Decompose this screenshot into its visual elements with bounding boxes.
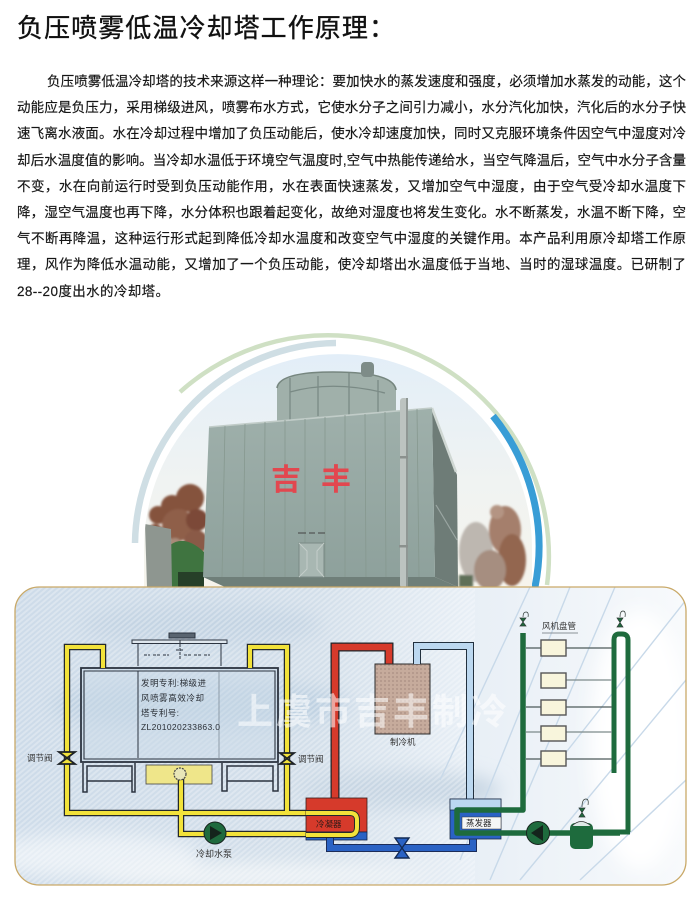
text block: principle description: 28--20度出水的冷却塔。 [17, 284, 169, 299]
text block: principle description [17, 73, 686, 299]
label box: evaporator: 蒸发器 [466, 818, 492, 828]
label: regulating valve left: 调节阀 [27, 753, 53, 763]
label: regulating valve right: 调节阀 [298, 754, 324, 764]
arc: green outer ring [180, 335, 549, 585]
green chilled water pipes [457, 633, 630, 833]
patent text [141, 678, 220, 732]
text block: principle description: 动能应是负压力，采用梯级进风，喷雾布水方式，它使水分子之间引力减小，水分汽化加快，汽化后的水分子快 [17, 99, 686, 115]
watermark: 上虞市吉丰制冷 [237, 691, 507, 732]
pump: chilled water pump [526, 822, 550, 844]
label box: evaporator [462, 817, 501, 829]
panel border [15, 587, 686, 885]
water basin [146, 765, 212, 784]
patent text: 发明专利:梯级进 [141, 678, 206, 688]
tower base [203, 577, 458, 587]
panel: system diagram [0, 587, 690, 888]
condenser [306, 798, 367, 840]
red condenser pipe [335, 647, 389, 798]
valve: right regulating valve [280, 753, 294, 764]
left tree [147, 484, 208, 554]
tower upper cylinder [277, 362, 396, 428]
arc: grey-blue ring [135, 343, 336, 543]
brand lettering on tower: 吉丰 [271, 464, 351, 497]
chiller [375, 664, 430, 734]
photo: cooling tower [140, 350, 540, 590]
expansion tank [570, 822, 593, 849]
cooling tower schematic [81, 633, 278, 792]
green bush [170, 541, 204, 587]
text block: principle description: 理，风作为降低水温动能，又增加了一个负压动能，使冷却塔出水温度低于当地、当时的湿球温度。已研制了 [17, 256, 686, 272]
text block: principle description: 却后水温度值的影响。当冷却水温低于环境空气温度时,空气中热能传递给水，当空气降温后，空气中水分子含量 [17, 153, 686, 168]
right tree [459, 505, 526, 590]
downpipe [399, 398, 408, 588]
panel background [0, 587, 690, 888]
text block: principle description: 负压喷雾低温冷却塔的技术来源这样一种理论：要加快水的蒸发速度和强度，必须增加水蒸发的动能，这个 [47, 73, 686, 89]
label: cooling water pump: 冷却水泵 [196, 848, 232, 859]
title: 负压喷雾低温冷却塔工作原理： [17, 13, 395, 43]
valve: blue line [395, 838, 409, 858]
patent text: ZL201020233863.0 [141, 722, 220, 732]
arc: blue ring [493, 416, 539, 587]
fan coil units [541, 640, 566, 766]
label: condenser: 冷凝器 [316, 819, 342, 829]
patent text: 塔专利号: [141, 708, 179, 718]
patent text: 风喷雾高效冷却 [141, 693, 204, 703]
grey stone [145, 524, 172, 587]
yellow cooling water pipes [67, 647, 307, 834]
text block: principle description: 降，湿空气温度也再下降，水分体积也跟着起变化，故绝对湿度也将发生变化。水不断蒸发，水温不断下降，空 [17, 204, 686, 220]
evaporator [450, 799, 501, 839]
text block: principle description: 气不断再降温，这种运行形式起到降低冷却水温度和改变空气中湿度的关键作用。本产品利用原冷却塔工作原 [17, 230, 686, 246]
blue return pipe [330, 838, 473, 848]
spray nozzle [174, 768, 186, 780]
text block: principle description: 速飞离水液面。水在冷却过程中增加了负压动能后，使水冷却速度加快，同时又克服环境条件因空气中湿度对冷 [17, 125, 686, 141]
light blue chilled pipe [417, 646, 470, 800]
access door [298, 533, 325, 577]
fan coil branch lines [526, 648, 612, 759]
valve: left regulating valve [59, 752, 75, 764]
air vents [520, 611, 625, 817]
tower right louvre side [432, 408, 458, 587]
tower front panel [203, 408, 435, 577]
label: fan coil: 风机盘管 [542, 621, 576, 631]
label: chiller: 制冷机 [390, 737, 416, 747]
text block: principle description: 不变，水在向前运行时受到负压动能作用，水在表面快速蒸发，又增加空气中湿度，由于空气受冷却水温度下 [17, 178, 686, 194]
pump: cooling water pump [204, 822, 226, 844]
